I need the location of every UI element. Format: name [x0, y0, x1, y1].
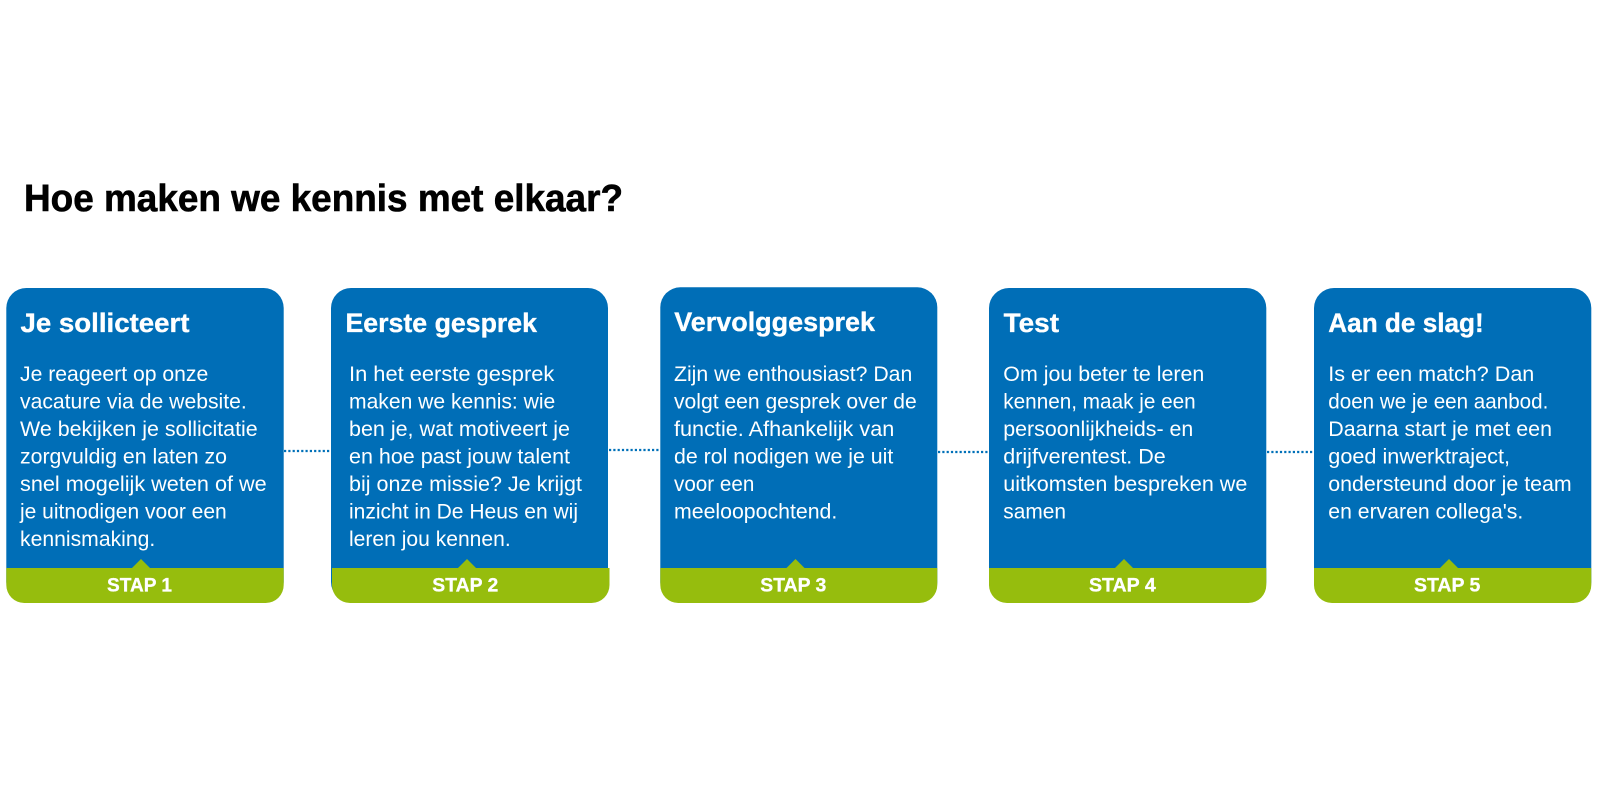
body text	[1328, 362, 1572, 524]
body text: voor een	[674, 472, 754, 496]
step label: STAP 3	[760, 576, 826, 596]
body text: persoonlijkheids- en	[1003, 417, 1193, 441]
body text	[19, 362, 267, 551]
body text: kennen, maak je een	[1003, 390, 1196, 414]
panel: stap 3	[660, 287, 937, 603]
body text: en ervaren collega's.	[1328, 500, 1523, 524]
body text: de rol nodigen we je uit	[674, 444, 893, 468]
body text: ben je, wat motiveert je	[349, 417, 570, 441]
panel: stap 2	[331, 288, 610, 603]
connector: step 2 to 3	[609, 449, 660, 451]
body text: functie. Afhankelijk van	[674, 417, 894, 441]
step label: STAP 2	[432, 576, 498, 596]
body text: Daarna start je met een	[1328, 417, 1552, 441]
body text	[674, 362, 917, 524]
body text: vacature via de website.	[20, 390, 247, 414]
heading: Je sollicteert	[20, 308, 190, 338]
step label: STAP 5	[1414, 576, 1481, 596]
connector: step 1 to 2	[284, 450, 331, 452]
panel: stap 4	[989, 288, 1266, 603]
body text: inzicht in De Heus en wij	[349, 500, 578, 524]
step label: STAP 1	[107, 576, 172, 596]
body text: We bekijken je sollicitatie	[20, 417, 258, 441]
body text	[1003, 362, 1247, 524]
body text: drijfverentest. De	[1003, 444, 1166, 468]
body text: en hoe past jouw talent	[349, 444, 570, 468]
body text: In het eerste gesprek	[349, 362, 555, 386]
body text: meeloopochtend.	[674, 500, 837, 524]
body text: snel mogelijk weten of we	[20, 472, 267, 496]
heading: Test	[1004, 308, 1059, 338]
body text: maken we kennis: wie	[349, 390, 555, 414]
body text: ondersteund door je team	[1328, 472, 1572, 496]
heading: Aan de slag!	[1328, 308, 1484, 338]
body text: zorgvuldig en laten zo	[20, 444, 227, 468]
body text: Om jou beter te leren	[1003, 362, 1204, 386]
body text: doen we je een aanbod.	[1328, 390, 1548, 414]
body text: goed inwerktraject,	[1328, 444, 1510, 468]
title: Hoe maken we kennis met elkaar?	[24, 178, 623, 220]
body text: Je reageert op onze	[20, 362, 208, 386]
body text: je uitnodigen voor een	[19, 500, 227, 524]
connector: step 4 to 5	[1267, 451, 1314, 453]
heading: Vervolggesprek	[674, 307, 876, 337]
heading: Eerste gesprek	[346, 308, 538, 338]
body text: Zijn we enthousiast? Dan	[674, 362, 912, 386]
body text: uitkomsten bespreken we	[1003, 472, 1247, 496]
panel: stap 5	[1314, 288, 1591, 603]
body text: samen	[1003, 500, 1066, 524]
body text: Is er een match? Dan	[1328, 362, 1534, 386]
step label: STAP 4	[1089, 576, 1156, 596]
body text: kennismaking.	[20, 527, 155, 551]
body text: volgt een gesprek over de	[674, 390, 917, 414]
body text: bij onze missie? Je krijgt	[349, 472, 582, 496]
body text	[349, 362, 582, 551]
body text: leren jou kennen.	[349, 527, 511, 551]
connector: step 3 to 4	[938, 451, 989, 453]
panel: stap 1	[6, 288, 284, 603]
